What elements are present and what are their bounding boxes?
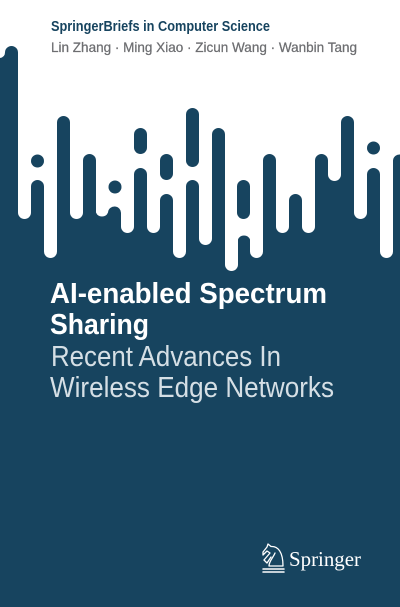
subtitle: Recent Advances In <box>51 341 281 373</box>
waveform dots and capsules <box>31 108 380 219</box>
icon: chess knight <box>263 544 284 572</box>
title: AI-enabled Spectrum <box>50 278 327 310</box>
subtitle: Wireless Edge Networks <box>50 372 334 404</box>
series name: SpringerBriefs in Computer Science <box>51 19 270 35</box>
authors: Lin Zhang · Ming Xiao · Zicun Wang · Wanbin Tang <box>51 39 357 55</box>
title: Sharing <box>50 309 149 341</box>
Springer logo <box>263 544 361 572</box>
wordmark: Springer <box>289 547 361 571</box>
title <box>50 278 327 341</box>
subtitle <box>50 341 334 404</box>
